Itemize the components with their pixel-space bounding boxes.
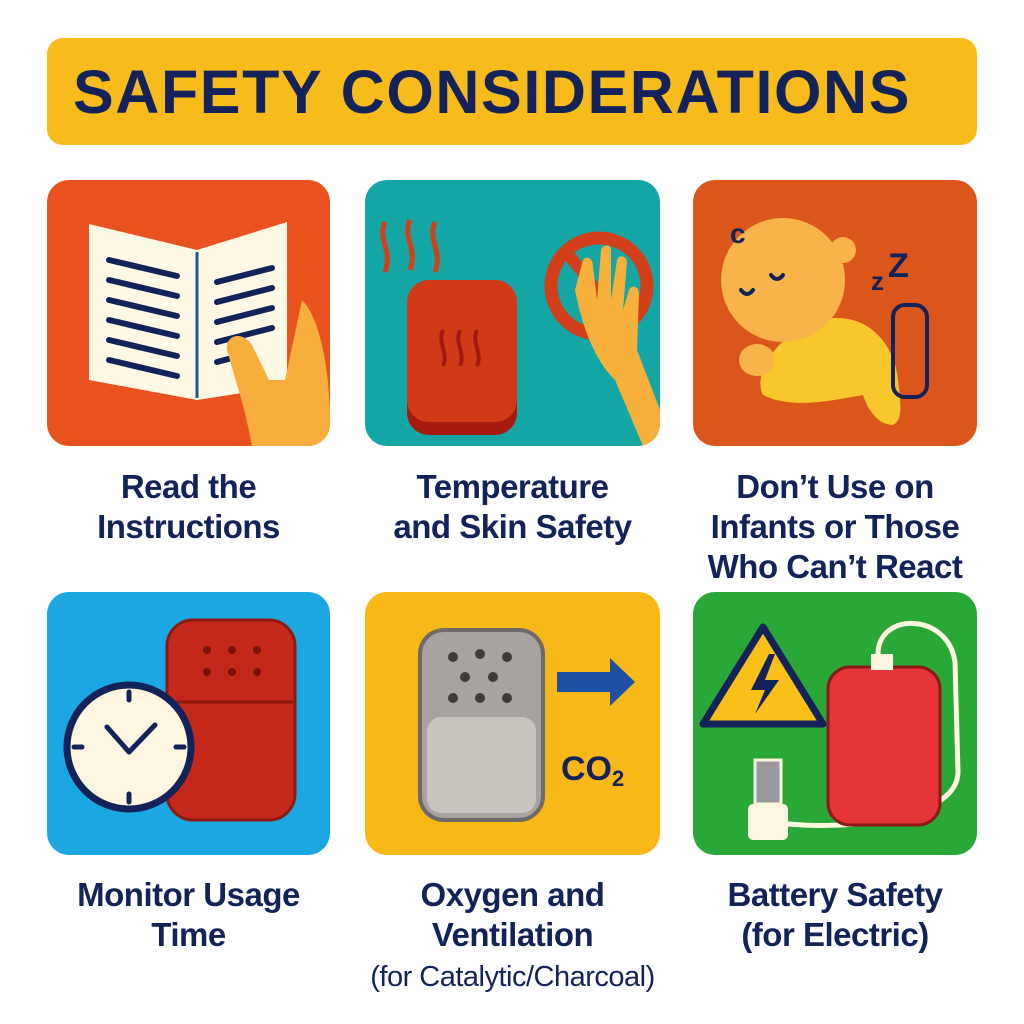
panel: read instructions: [47, 180, 330, 446]
label: CO2: CO: [561, 750, 612, 788]
panel: oxygen: [365, 592, 660, 855]
panel: monitor usage: [47, 592, 330, 855]
caption: read: [97, 468, 280, 545]
panel: infants: [693, 180, 977, 446]
icon: zzz: z: [871, 266, 884, 296]
icon: warning triangle: [703, 627, 823, 724]
caption: oxygen: [370, 876, 655, 993]
caption: read: Instructions: [97, 508, 280, 545]
caption: battery: Battery Safety: [728, 876, 942, 913]
icon: clock: [67, 685, 191, 809]
panel: infants: Z: [888, 247, 909, 285]
caption: monitor: Monitor Usage: [77, 876, 300, 913]
caption: monitor: Time: [151, 916, 226, 953]
icon: warmer: [167, 620, 295, 820]
label: CO2: 2: [612, 766, 624, 791]
caption: infants: Don’t Use on: [736, 468, 934, 505]
caption: oxygen: (for Catalytic/Charcoal): [370, 961, 655, 993]
caption: oxygen: Oxygen and: [421, 876, 604, 913]
icon: heat waves: [383, 220, 437, 272]
panel: battery: [693, 592, 977, 855]
title: SAFETY CONSIDERATIONS: [73, 58, 911, 126]
icon: sleeping baby: c: [730, 218, 746, 249]
caption: battery: (for Electric): [741, 916, 929, 953]
caption: temperature: and Skin Safety: [393, 508, 632, 545]
icon: hand warmer outline: [893, 305, 927, 397]
caption: infants: Who Can’t React: [708, 548, 962, 585]
panel: temperature: [365, 180, 660, 446]
icon: hand: [227, 300, 330, 446]
caption: oxygen: Ventilation: [432, 916, 593, 953]
caption: battery: [728, 876, 943, 953]
caption: read: Read the: [121, 468, 256, 505]
title: [47, 38, 977, 145]
icon: power bank: [828, 667, 940, 825]
caption: infants: Infants or Those: [711, 508, 959, 545]
icon: arrow: [557, 658, 635, 706]
icon: warmer pad: [407, 285, 517, 435]
icon: sleeping baby: [721, 218, 900, 425]
icon: no-touch sign and hand: [551, 238, 647, 334]
icon: catalytic warmer: [420, 630, 543, 820]
caption: monitor: [77, 876, 300, 953]
icon: cable: [773, 623, 958, 825]
caption: infants: [708, 468, 962, 585]
icon: open book: [89, 222, 287, 400]
caption: temperature: [393, 468, 632, 545]
caption: temperature: Temperature: [417, 468, 608, 505]
